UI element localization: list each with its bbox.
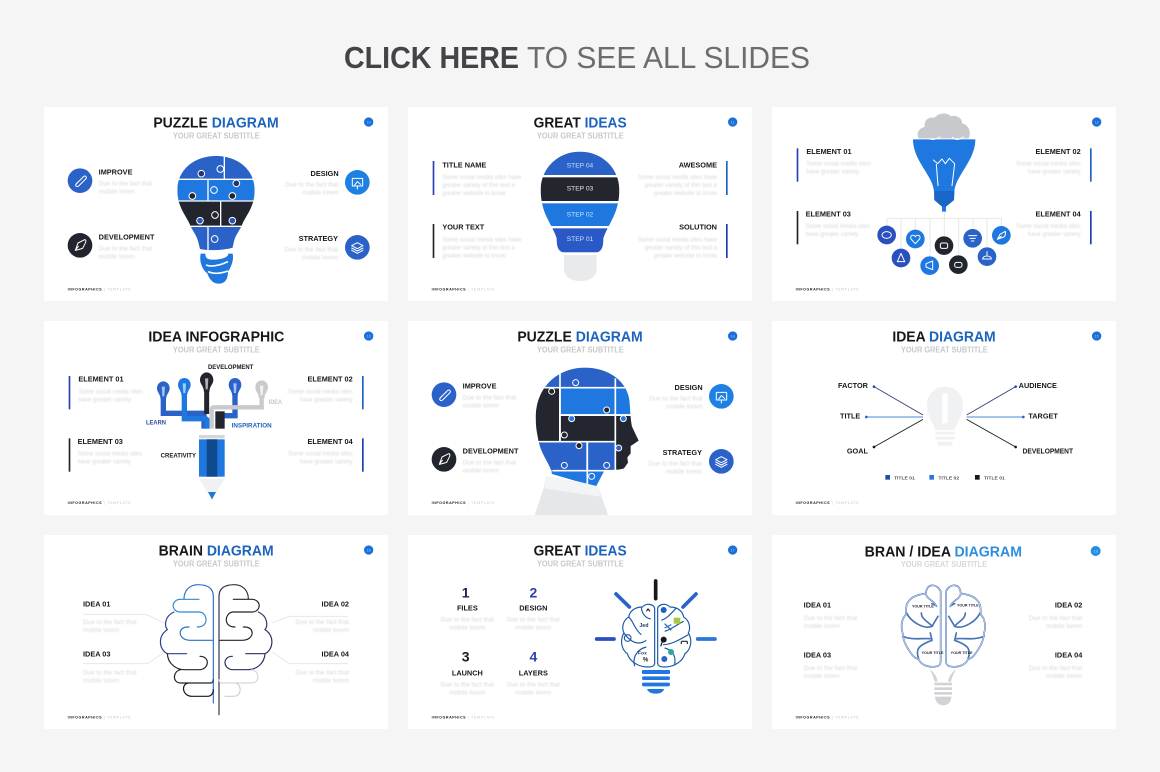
page badge <box>728 545 737 555</box>
item: improve <box>68 168 152 195</box>
step 4: 4 <box>529 648 537 664</box>
bulb base <box>930 669 956 705</box>
item: design: Due to the fact that <box>285 182 339 189</box>
step 1: mobile lorem <box>449 625 485 632</box>
subtitle: YOUR GREAT SUBTITLE <box>173 559 260 568</box>
item: idea 02 <box>296 599 349 634</box>
footer: INFOGRAPHICS | TEMPLATE <box>68 715 131 719</box>
item: idea 04: mobile lorem <box>313 677 349 684</box>
heading: click here to see all slides: CLICK HERE <box>344 40 519 75</box>
item: improve <box>432 382 516 409</box>
title: IDEA DIAGRAM <box>892 330 996 346</box>
item: idea 02: mobile lorem <box>313 627 349 634</box>
title: IDEA INFOGRAPHIC <box>148 330 285 346</box>
item: strategy: STRATEGY <box>299 234 338 243</box>
item: idea 01: Due to the fact that <box>804 615 857 622</box>
item: idea 04: IDEA 04 <box>322 650 350 659</box>
item: improve: Due to the fact that <box>463 394 516 401</box>
labels: INSPIRATION <box>232 423 272 430</box>
item: element 01: have greater variety <box>806 170 859 176</box>
item: solution: greater website to know <box>654 253 718 259</box>
item: development: Due to the fact that <box>463 459 516 466</box>
item: idea 01 <box>83 599 137 634</box>
step 2 <box>507 584 560 632</box>
step 4: LAYERS <box>519 669 548 678</box>
step bulb: STEP 03 <box>567 185 594 192</box>
item: development: mobile lorem <box>99 253 135 260</box>
labels: AUDIENCE <box>1019 381 1057 390</box>
page badge: 10 <box>367 120 371 124</box>
brain left half <box>160 585 213 703</box>
item: element 01 <box>797 147 871 182</box>
item: element 02: Some social media sites <box>288 389 353 395</box>
item: design: DESIGN <box>311 169 339 178</box>
item: awesome: AWESOME <box>679 160 717 169</box>
item: element 04 <box>1016 210 1092 244</box>
step bulb: STEP 02 <box>567 211 594 218</box>
page badge: 13 <box>367 334 371 338</box>
item: idea 01: IDEA 01 <box>804 600 831 609</box>
connector lines <box>865 385 1025 448</box>
item: element 02: ELEMENT 02 <box>307 375 353 384</box>
doodle brain: % <box>643 657 649 663</box>
page badge: 18 <box>1094 549 1098 553</box>
item: idea 04 <box>1029 650 1083 680</box>
item: idea 01: Due to the fact that <box>83 619 137 626</box>
labels: FACTOR <box>838 381 869 390</box>
panel: funnel bulb slide <box>772 107 1116 301</box>
legend: TITLE 01 <box>984 475 1005 481</box>
item: development <box>68 233 155 260</box>
item: design: mobile lorem <box>666 404 703 411</box>
page badge <box>728 117 737 127</box>
item: element 01: have greater variety <box>78 397 131 403</box>
item: element 02: have greater variety <box>1028 170 1081 176</box>
item: design: DESIGN <box>675 383 703 392</box>
item: design: Due to the fact that <box>649 396 703 403</box>
item: solution <box>638 223 728 259</box>
outline brain <box>902 585 985 667</box>
panel: great ideas brain bulb slide <box>408 535 752 729</box>
item: element 03: Some social media sites <box>806 224 870 230</box>
step 3 <box>441 648 494 697</box>
item: idea 02: Due to the fact that <box>1029 615 1083 622</box>
item: element 04: ELEMENT 04 <box>1035 210 1082 219</box>
title: BRAIN DIAGRAM <box>159 544 274 560</box>
item: strategy <box>649 448 734 476</box>
item: element 01 <box>69 375 143 409</box>
item: development: DEVELOPMENT <box>463 447 519 456</box>
item: your text <box>433 223 522 259</box>
item: element 02 <box>288 375 364 409</box>
footer: INFOGRAPHICS | TEMPLATE <box>68 501 131 505</box>
item: idea 03: Due to the fact that <box>83 669 137 676</box>
page badge <box>364 545 373 555</box>
page badge: 11 <box>731 120 735 124</box>
doodle brain: Jed <box>639 623 649 629</box>
page badge: 17 <box>731 548 735 552</box>
item: element 04: ELEMENT 04 <box>307 437 354 446</box>
item: title name: greater variety of thin text a <box>442 183 516 189</box>
item: element 03: Some social media sites <box>78 452 142 458</box>
title: GREAT IDEAS <box>534 116 627 132</box>
item: your text: YOUR TEXT <box>442 223 485 232</box>
item: improve: mobile lorem <box>99 188 135 195</box>
item: strategy: Due to the fact that <box>649 461 702 468</box>
item: element 02: ELEMENT 02 <box>1035 147 1081 156</box>
item: design: mobile lorem <box>302 190 339 197</box>
item: title name: Some social media sites have <box>442 175 522 181</box>
item: idea 02: IDEA 02 <box>322 599 349 608</box>
step 2: mobile lorem <box>515 625 551 632</box>
outline brain: YOUR TITLE <box>957 604 979 608</box>
item: development: Due to the fact that <box>99 245 152 252</box>
labels: DEVELOPMENT <box>1023 446 1073 455</box>
item: development: mobile lorem <box>463 467 499 474</box>
title: GREAT IDEAS <box>534 544 627 560</box>
item: element 01: Some social media sites <box>806 162 871 168</box>
item: idea 03 <box>804 650 857 680</box>
item: element 02 <box>1016 147 1092 182</box>
item: element 03: ELEMENT 03 <box>806 210 851 219</box>
subtitle: YOUR GREAT SUBTITLE <box>173 131 260 140</box>
subtitle: YOUR GREAT SUBTITLE <box>537 559 624 568</box>
item: idea 02: IDEA 02 <box>1055 600 1082 609</box>
item: strategy: STRATEGY <box>663 448 702 457</box>
footer: INFOGRAPHICS | TEMPLATE <box>432 715 495 719</box>
page badge <box>1092 331 1101 341</box>
item: idea 04: mobile lorem <box>1046 673 1082 680</box>
legend: TITLE 01 <box>894 475 915 481</box>
item: idea 04 <box>296 650 350 684</box>
footer: INFOGRAPHICS | TEMPLATE <box>796 287 859 291</box>
footer: INFOGRAPHICS | TEMPLATE <box>796 501 859 505</box>
step 3: LAUNCH <box>452 669 483 678</box>
item: improve: Due to the fact that <box>99 180 152 187</box>
item: idea 04: Due to the fact that <box>1029 665 1083 672</box>
page badge <box>1091 546 1101 556</box>
item: element 04: Some social media sites <box>288 452 353 458</box>
item: idea 03: mobile lorem <box>83 677 119 684</box>
footer: INFOGRAPHICS | TEMPLATE <box>68 287 131 291</box>
page badge: 15 <box>1095 334 1099 338</box>
item: title name: TITLE NAME <box>442 160 486 169</box>
subtitle: YOUR GREAT SUBTITLE <box>537 131 624 140</box>
labels: IDEA <box>269 399 282 406</box>
outline brain: YOUR TITLE <box>922 651 944 655</box>
labels: DEVELOPMENT <box>208 364 253 371</box>
item: design <box>285 169 370 197</box>
item: idea 03 <box>83 650 137 684</box>
step 3: Due to the fact that <box>441 682 494 689</box>
item: your text: greater variety of thin text a <box>442 245 516 251</box>
subtitle: YOUR GREAT SUBTITLE <box>173 345 260 354</box>
item: title name <box>433 160 522 197</box>
step 3: 3 <box>462 648 470 664</box>
item: element 04 <box>288 437 364 472</box>
item: element 01: ELEMENT 01 <box>806 147 852 156</box>
step bulb: STEP 01 <box>567 236 594 243</box>
panel: great ideas step bulb slide <box>408 107 752 301</box>
panel: puzzle bulb slide <box>44 107 388 301</box>
page badge <box>728 331 737 341</box>
item: awesome: greater website to know <box>654 191 718 197</box>
item: idea 02: mobile lorem <box>1046 623 1082 630</box>
funnel bulb <box>913 137 975 212</box>
panel: idea diagram slide <box>772 321 1116 515</box>
item: awesome: Some social media sites have <box>638 175 718 181</box>
page badge <box>364 331 373 341</box>
puzzle head <box>533 367 641 488</box>
pencil <box>199 435 225 500</box>
pipes and bulbs <box>157 372 268 429</box>
item: improve: IMPROVE <box>99 168 133 177</box>
labels <box>146 364 282 460</box>
item: your text: Some social media sites have <box>442 237 522 243</box>
item: idea 03: IDEA 03 <box>804 650 831 659</box>
footer: INFOGRAPHICS | TEMPLATE <box>432 287 495 291</box>
step bulb: STEP 04 <box>567 162 594 169</box>
title: PUZZLE DIAGRAM <box>153 116 279 132</box>
step 2: Due to the fact that <box>507 617 560 624</box>
item: idea 01: IDEA 01 <box>83 599 110 608</box>
labels: TARGET <box>1028 412 1058 421</box>
item: element 03 <box>797 210 870 244</box>
subtitle: YOUR GREAT SUBTITLE <box>537 345 624 354</box>
panel: idea infographic slide <box>44 321 388 515</box>
item: improve: mobile lorem <box>463 402 499 409</box>
item: element 02: Some social media sites <box>1016 162 1081 168</box>
item: strategy: mobile lorem <box>302 255 338 262</box>
brain right half <box>219 585 272 715</box>
legend <box>885 475 1005 481</box>
item: element 01: Some social media sites <box>78 389 143 395</box>
item: idea 04: IDEA 04 <box>1055 650 1083 659</box>
icon circles <box>877 226 1011 275</box>
page badge: 12 <box>1095 120 1099 124</box>
connector lines <box>887 212 1001 258</box>
step 2: 2 <box>529 584 537 600</box>
item: improve: IMPROVE <box>463 382 497 391</box>
shoulders <box>535 476 608 515</box>
connector lines <box>83 614 348 664</box>
step 4: Due to the fact that <box>507 682 560 689</box>
step 1 <box>441 584 494 632</box>
item: awesome: greater variety of thin text a <box>644 183 718 189</box>
item: element 03 <box>69 437 142 472</box>
heading: click here to see all slides: TO SEE ALL SLIDES <box>527 40 810 75</box>
title: PUZZLE DIAGRAM <box>517 330 643 346</box>
page badge <box>1092 117 1101 127</box>
step 4: mobile lorem <box>515 690 551 697</box>
item: solution: greater variety of thin text a <box>644 245 718 251</box>
item: idea 02: Due to the fact that <box>296 619 349 626</box>
panel: brain diagram slide <box>44 535 388 729</box>
item: idea 01: mobile lorem <box>804 623 840 630</box>
bulb base <box>642 670 670 694</box>
step 4 <box>507 648 560 697</box>
page badge: 14 <box>731 334 735 338</box>
labels: TITLE <box>840 412 860 421</box>
item: idea 01: mobile lorem <box>83 627 119 634</box>
item: element 02: have greater variety <box>300 397 353 403</box>
subtitle: YOUR GREAT SUBTITLE <box>901 560 988 569</box>
step 3: mobile lorem <box>449 690 485 697</box>
item: element 04: have greater variety <box>1028 232 1081 238</box>
labels <box>838 381 1073 455</box>
item: strategy: Due to the fact that <box>285 247 338 254</box>
item: your text: greater website to know <box>442 253 506 259</box>
step 1: 1 <box>462 584 470 600</box>
item: development: DEVELOPMENT <box>99 233 155 242</box>
page badge: 16 <box>367 548 371 552</box>
item: element 03: have greater variety <box>806 232 859 238</box>
item: idea 04: Due to the fact that <box>296 669 349 676</box>
item: element 04: have greater variety <box>300 460 353 466</box>
item: idea 03: Due to the fact that <box>804 665 857 672</box>
item: element 03: have greater variety <box>78 460 131 466</box>
item: solution: Some social media sites have <box>638 237 718 243</box>
step 1: FILES <box>457 604 478 613</box>
brain cloud <box>918 113 970 138</box>
step 1: Due to the fact that <box>441 617 494 624</box>
item: development <box>432 447 519 474</box>
pale bulb <box>927 387 963 446</box>
step 2: DESIGN <box>519 604 547 613</box>
heading: click here to see all slides <box>344 40 810 75</box>
footer: INFOGRAPHICS | TEMPLATE <box>796 715 859 719</box>
item: solution: SOLUTION <box>679 223 717 232</box>
doodle brain: Fox <box>638 651 647 657</box>
panel: puzzle head slide <box>408 321 752 515</box>
doodle brain <box>622 604 691 667</box>
item: idea 02 <box>1029 600 1083 630</box>
item: idea 03: mobile lorem <box>804 673 840 680</box>
item: strategy: mobile lorem <box>666 469 702 476</box>
item: element 03: ELEMENT 03 <box>78 437 123 446</box>
labels: GOAL <box>847 446 869 455</box>
idea rays <box>597 581 715 639</box>
page badge <box>364 117 373 127</box>
item: idea 01 <box>804 600 857 630</box>
item: title name: greater website to know <box>442 191 506 197</box>
item: element 04: Some social media sites <box>1016 224 1081 230</box>
labels: LEARN <box>146 420 166 427</box>
legend: TITLE 02 <box>938 475 959 481</box>
item: element 01: ELEMENT 01 <box>78 375 124 384</box>
title: BRAN / IDEA DIAGRAM <box>865 545 1022 561</box>
puzzle bulb <box>174 155 257 284</box>
item: strategy <box>285 234 370 262</box>
labels: CREATIVITY <box>161 453 197 460</box>
outline brain: YOUR TITLE <box>912 604 934 608</box>
panel: brain idea diagram slide <box>772 535 1116 729</box>
item: awesome <box>638 160 728 197</box>
item: idea 03: IDEA 03 <box>83 650 110 659</box>
outline brain: YOUR TITLE <box>951 651 973 655</box>
step bulb <box>538 151 621 281</box>
item: design <box>649 383 734 411</box>
footer: INFOGRAPHICS | TEMPLATE <box>432 501 495 505</box>
subtitle: YOUR GREAT SUBTITLE <box>901 345 988 354</box>
